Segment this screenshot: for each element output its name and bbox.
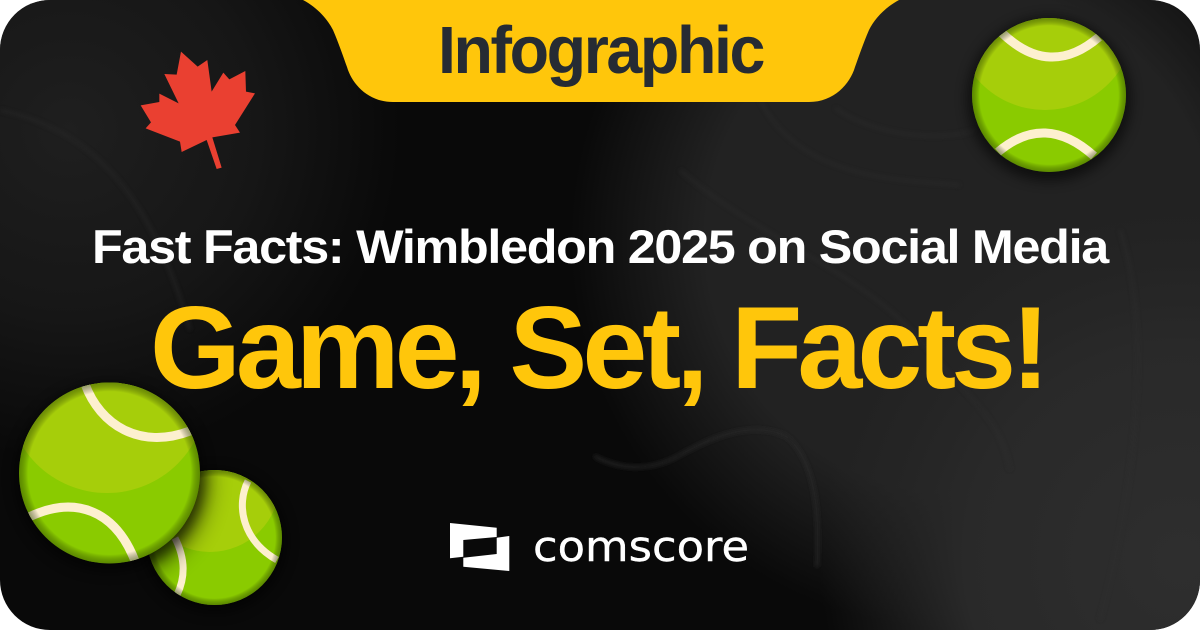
tab label: Infographic — [438, 13, 764, 88]
logo: comscore — [450, 522, 749, 571]
icon: tennis ball top right — [966, 16, 1132, 182]
header tab — [303, 0, 899, 102]
logo mark — [450, 523, 509, 571]
icon: maple leaf — [141, 52, 255, 169]
icon: tennis ball small — [149, 470, 282, 605]
icon: tennis ball large — [19, 382, 212, 568]
subtitle: Fast Facts: Wimbledon 2025 on Social Media — [92, 220, 1110, 273]
logo wordmark: comscore — [533, 522, 749, 571]
headline: Game, Set, Facts! — [150, 282, 1045, 413]
